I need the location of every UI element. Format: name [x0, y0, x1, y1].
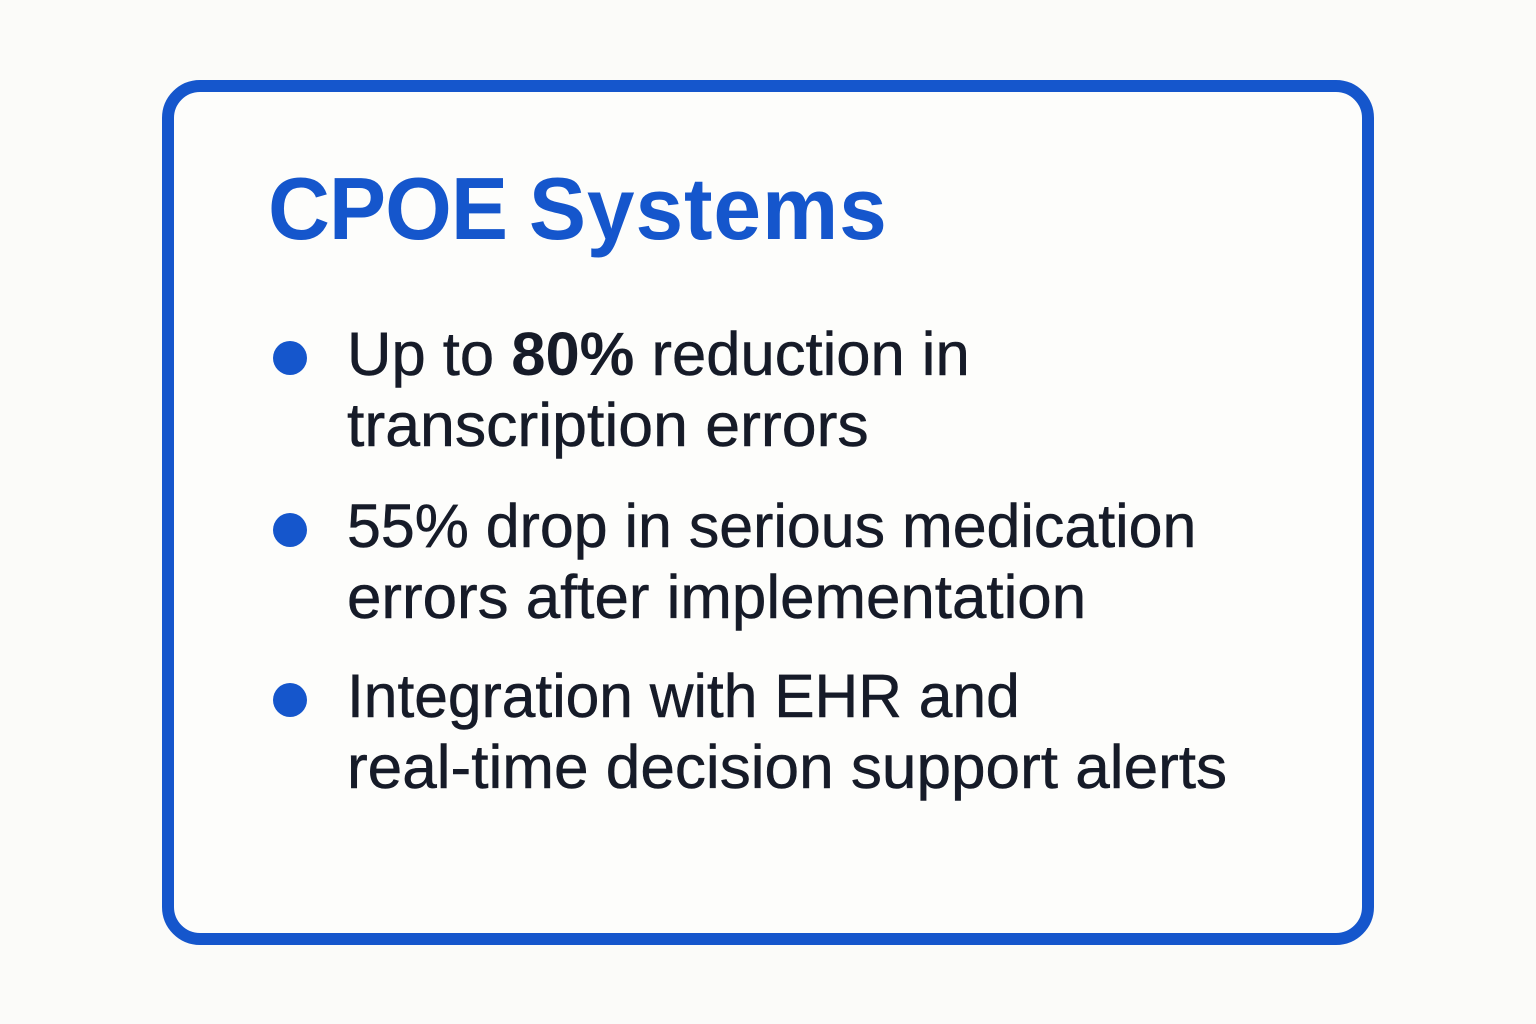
- bullet 1 line 2: transcription errors: [347, 391, 869, 459]
- bullet 3 line 1: Integration with EHR and: [347, 662, 1020, 730]
- bullet 3 line 2: real-time decision support alerts: [347, 733, 1227, 801]
- bullet 2 line 1: 55% drop in serious medication: [347, 492, 1196, 560]
- panel: CPOE card: [162, 80, 1374, 945]
- bullet 2 line 2: errors after implementation: [347, 563, 1086, 631]
- bullet 1 line 1: Up to 80% reduction in: [347, 320, 970, 388]
- bullet 3 icon: [273, 683, 307, 717]
- title: CPOE Systems: [268, 159, 888, 258]
- bullet 1 icon: [273, 341, 307, 375]
- bullet 2 icon: [273, 513, 307, 547]
